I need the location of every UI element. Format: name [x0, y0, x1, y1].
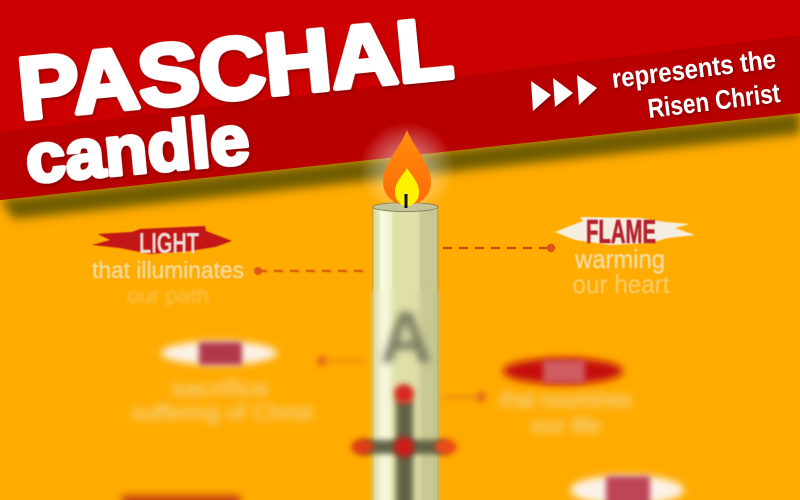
connector: flame	[443, 244, 555, 252]
candle lower blur	[373, 290, 438, 500]
red nail right	[435, 439, 457, 455]
flame text line one: warming	[574, 244, 665, 274]
wax text: suffering of Christ	[131, 400, 313, 425]
connector: light	[254, 267, 367, 275]
candle top	[373, 202, 438, 212]
wax text	[131, 376, 313, 425]
callout: bottom left	[122, 495, 240, 500]
flame heading: FLAME	[586, 213, 656, 250]
wick	[404, 194, 408, 208]
life heading	[543, 360, 585, 383]
red nail left	[351, 439, 373, 455]
outer flame	[383, 130, 431, 205]
wax text: sacrifice	[171, 376, 269, 401]
candle	[351, 202, 457, 500]
flame text line two: our heart	[572, 269, 670, 299]
banner shadow	[0, 112, 800, 219]
light text line one: that illuminates	[92, 257, 244, 283]
callout: wax	[131, 341, 313, 425]
flame glow	[359, 122, 455, 218]
cross horizontal	[362, 440, 446, 454]
candle body	[373, 207, 438, 500]
tagline: represents the	[610, 44, 778, 94]
light heading: LIGHT	[139, 228, 199, 260]
life text: that nourishes	[500, 387, 632, 412]
heading	[606, 476, 650, 500]
inner flame	[395, 168, 419, 206]
alpha symbol: A	[380, 298, 432, 378]
callout: light	[92, 226, 244, 308]
title: PASCHAL: PASCHAL	[14, 0, 457, 138]
tagline	[610, 44, 782, 124]
subtitle: candle: candle	[22, 100, 252, 198]
connector: wax	[317, 356, 366, 366]
icon: triple arrows	[531, 75, 597, 111]
wax brush	[161, 341, 277, 365]
white brush	[570, 475, 684, 500]
connector: life	[442, 392, 486, 402]
wax heading	[199, 342, 242, 365]
callout: life	[500, 358, 632, 438]
red nail centre	[394, 437, 414, 457]
light text line two: our path	[127, 283, 209, 308]
callout: flame	[555, 213, 695, 299]
life text: our life	[531, 413, 601, 438]
life brush	[503, 358, 623, 384]
cross vertical	[396, 400, 413, 500]
flame	[383, 130, 431, 208]
life text	[500, 387, 632, 438]
callout: bottom right	[570, 475, 684, 500]
light brush	[92, 226, 232, 254]
red nail top	[394, 384, 414, 404]
header banner	[0, 0, 800, 200]
flame brush	[555, 217, 695, 245]
